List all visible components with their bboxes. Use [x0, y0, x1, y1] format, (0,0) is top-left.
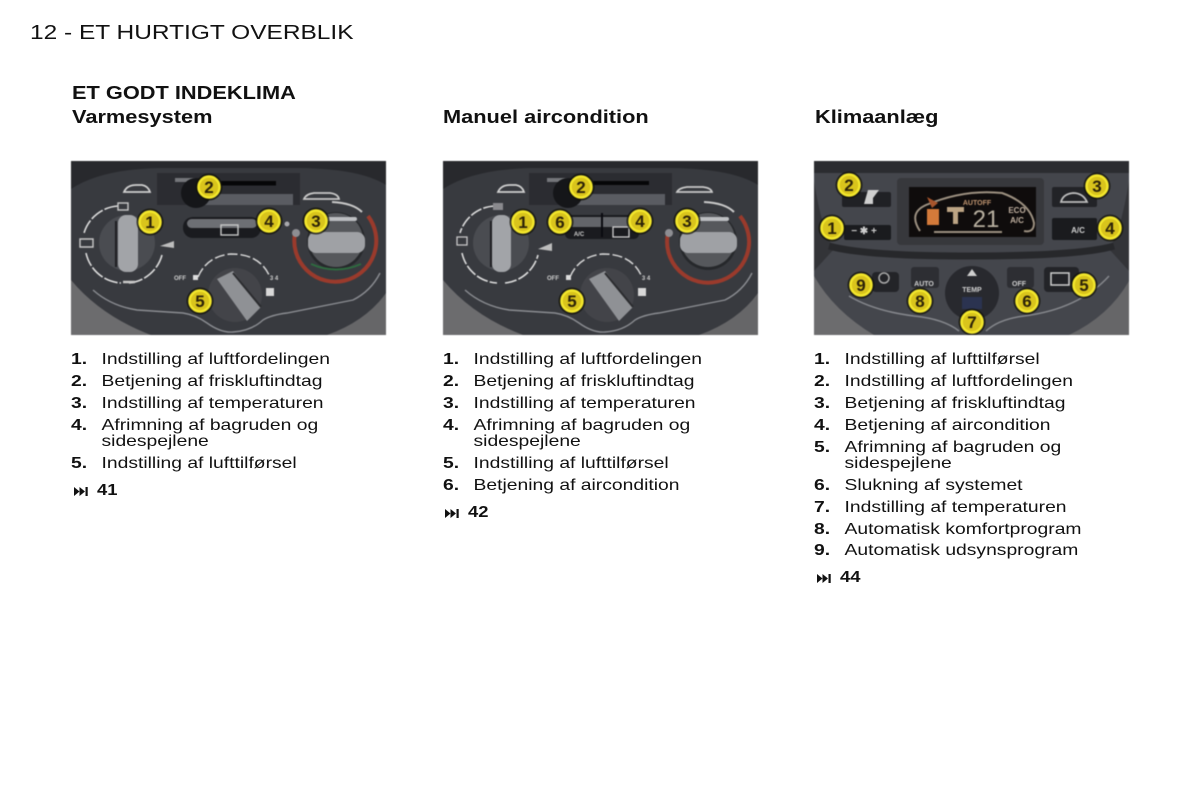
- panel: climate system controls photo: OFF: [1012, 281, 1027, 288]
- badge 4: 4: [264, 212, 274, 231]
- numbered list: Klimaanlæg: 9.: [814, 542, 830, 559]
- badge 5: 5: [1079, 276, 1089, 295]
- page reference: 41: [74, 482, 117, 499]
- badge 2: [196, 174, 222, 200]
- panel: climate system controls photo: AUTO: [914, 281, 934, 288]
- badge 1: 1: [145, 213, 155, 232]
- panel: manual air conditioning controls photo: 3 4: [642, 276, 651, 282]
- numbered list: Varmesystem: Betjening af friskluftindtag: [102, 373, 322, 390]
- page reference: 44: [817, 569, 860, 586]
- badge 5: [558, 288, 586, 314]
- badge 5: [186, 288, 214, 314]
- badge 8: [906, 288, 934, 314]
- panel: climate system controls photo: TEMP: [962, 287, 982, 294]
- numbered list: Manuel aircondition: sidespejlene: [474, 433, 581, 450]
- badge 1: [818, 214, 846, 242]
- badge 1: [510, 208, 536, 236]
- panel: heating controls photo: [70, 160, 387, 336]
- badge 3: 3: [311, 212, 321, 231]
- numbered list: Varmesystem: 5.: [71, 455, 87, 472]
- badge 5: [1070, 272, 1098, 298]
- badge 6: 6: [555, 213, 565, 232]
- badge 1: 1: [518, 213, 528, 232]
- section title: ET GODT INDEKLIMA: [72, 83, 296, 103]
- numbered list: Klimaanlæg: 4.: [814, 417, 830, 434]
- numbered list: Klimaanlæg: Automatisk komfortprogram: [845, 521, 1082, 538]
- panel: manual air conditioning controls photo: A/C: [574, 232, 585, 238]
- panel: climate system controls photo: 21: [973, 206, 999, 233]
- numbered list: Varmesystem: sidespejlene: [102, 433, 209, 450]
- numbered list: Manuel aircondition: 1.: [443, 351, 459, 368]
- numbered list: Manuel aircondition: Indstilling af temperaturen: [474, 395, 696, 412]
- badge 2: [836, 172, 862, 198]
- badge 4: 4: [635, 212, 645, 231]
- heading: Klimaanlæg: Klimaanlæg: [815, 106, 938, 126]
- badge 3: [674, 208, 700, 234]
- numbered list: Klimaanlæg: sidespejlene: [845, 455, 952, 472]
- numbered list: Manuel aircondition: 6.: [443, 477, 459, 494]
- numbered list: Varmesystem: 4.: [71, 417, 87, 434]
- badge 2: 2: [576, 178, 586, 197]
- page heading: 12 - ET HURTIGT OVERBLIK: [30, 22, 354, 44]
- badge 3: 3: [682, 212, 692, 231]
- numbered list: Klimaanlæg: Slukning af systemet: [845, 477, 1023, 494]
- badge 2: 2: [844, 176, 854, 195]
- badge 3: 3: [1092, 177, 1102, 196]
- numbered list: Manuel aircondition: Indstilling af luftfordelingen: [474, 351, 702, 368]
- numbered list: Varmesystem: Indstilling af lufttilførsel: [102, 455, 297, 472]
- panel: climate system controls photo: A/C: [1071, 226, 1085, 235]
- numbered list: Klimaanlæg: 3.: [814, 395, 830, 412]
- numbered list: Varmesystem: Indstilling af luftfordelingen: [102, 351, 330, 368]
- numbered list: Manuel aircondition: [443, 351, 702, 494]
- numbered list: Manuel aircondition: 2.: [443, 373, 459, 390]
- panel: heating controls photo: OFF: [174, 276, 186, 282]
- numbered list: Varmesystem: Afrimning af bagruden og: [102, 417, 318, 434]
- badge 3: [1084, 172, 1110, 200]
- numbered list: Klimaanlæg: Automatisk udsynsprogram: [845, 542, 1078, 559]
- badge 6: 6: [1022, 292, 1032, 311]
- badge 7: 7: [967, 313, 977, 332]
- panel: heating controls photo: 3 4: [270, 276, 279, 282]
- panel: climate system controls photo: − ✱ +: [851, 226, 877, 237]
- badge 7: [958, 308, 986, 336]
- badge 2: 2: [204, 178, 214, 197]
- panel: climate system controls photo: [813, 160, 1130, 336]
- numbered list: Manuel aircondition: 5.: [443, 455, 459, 472]
- badge 1: 1: [827, 219, 837, 238]
- numbered list: Varmesystem: 1.: [71, 351, 87, 368]
- panel: climate system controls photo: AUTOFF: [963, 200, 992, 207]
- badge 1: [136, 208, 164, 236]
- numbered list: Manuel aircondition: Betjening af friskluftindtag: [474, 373, 694, 390]
- badge 9: 9: [856, 276, 866, 295]
- numbered list: Klimaanlæg: 7.: [814, 499, 830, 516]
- numbered list: Klimaanlæg: Betjening af aircondition: [845, 417, 1050, 434]
- page reference: 42: 42: [468, 504, 488, 521]
- numbered list: Manuel aircondition: 4.: [443, 417, 459, 434]
- heading: Manuel aircondition: Manuel aircondition: [443, 106, 649, 126]
- numbered list: Manuel aircondition: 3.: [443, 395, 459, 412]
- badge 9: [848, 272, 874, 298]
- page reference: 41: 41: [97, 482, 117, 499]
- page reference: 42: [445, 504, 488, 521]
- badge 4: 4: [1105, 219, 1115, 238]
- badge 6: [546, 208, 574, 236]
- numbered list: Klimaanlæg: 8.: [814, 521, 830, 538]
- numbered list: Manuel aircondition: Betjening af aircondition: [474, 477, 679, 494]
- badge 2: [568, 174, 594, 200]
- badge 8: 8: [915, 292, 925, 311]
- badge 5: 5: [567, 292, 577, 311]
- badge 4: [256, 208, 282, 234]
- badge 3: [302, 208, 330, 234]
- numbered list: Manuel aircondition: Indstilling af lufttilførsel: [474, 455, 669, 472]
- badge 5: 5: [195, 292, 205, 311]
- numbered list: Klimaanlæg: Betjening af friskluftindtag: [845, 395, 1065, 412]
- numbered list: Klimaanlæg: [814, 351, 1082, 559]
- numbered list: Klimaanlæg: 1.: [814, 351, 830, 368]
- badge 6: [1014, 288, 1040, 314]
- panel: manual air conditioning controls photo: [442, 160, 759, 336]
- panel: manual air conditioning controls photo: OFF: [547, 276, 559, 282]
- panel: climate system controls photo: A/C: [1010, 216, 1024, 225]
- numbered list: Klimaanlæg: Indstilling af temperaturen: [845, 499, 1067, 516]
- panel: climate system controls photo: ECO: [1008, 206, 1026, 215]
- badge 4: [626, 208, 654, 234]
- numbered list: Klimaanlæg: Indstilling af luftfordelingen: [845, 373, 1073, 390]
- numbered list: Manuel aircondition: Afrimning af bagruden og: [474, 417, 690, 434]
- numbered list: Klimaanlæg: Afrimning af bagruden og: [845, 439, 1061, 456]
- page reference: 44: 44: [840, 569, 860, 586]
- numbered list: Klimaanlæg: 5.: [814, 439, 830, 456]
- badge 4: [1096, 214, 1124, 242]
- numbered list: Varmesystem: 2.: [71, 373, 87, 390]
- numbered list: Varmesystem: [71, 351, 330, 472]
- heading: Varmesystem: Varmesystem: [72, 106, 212, 126]
- numbered list: Varmesystem: Indstilling af temperaturen: [102, 395, 324, 412]
- numbered list: Varmesystem: 3.: [71, 395, 87, 412]
- numbered list: Klimaanlæg: Indstilling af lufttilførsel: [845, 351, 1040, 368]
- numbered list: Klimaanlæg: 6.: [814, 477, 830, 494]
- numbered list: Klimaanlæg: 2.: [814, 373, 830, 390]
